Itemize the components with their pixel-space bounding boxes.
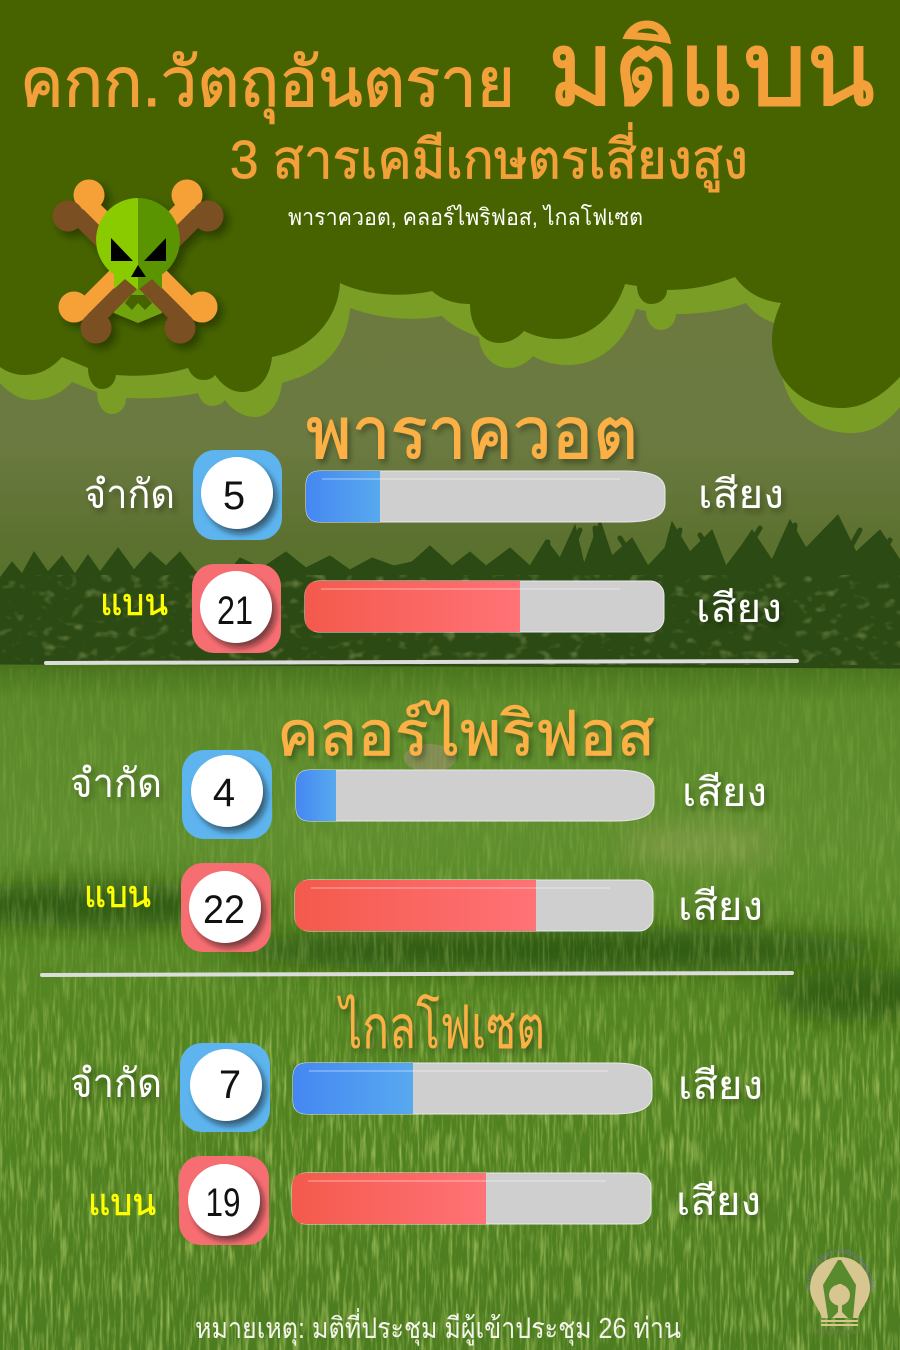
title: มติแบน <box>548 12 875 128</box>
green slime frame, lighter layer <box>0 0 900 433</box>
section: paraquat <box>84 394 784 653</box>
row: restrict 5 votes: เสียง <box>698 473 784 517</box>
row: restrict 4 votes: เสียง <box>682 771 767 815</box>
row: ban 22 votes: แบน <box>84 874 151 916</box>
row: restrict 4 votes: จำกัด <box>70 762 162 806</box>
row: ban 21 votes: แบน <box>100 582 168 624</box>
section: chlorpyrifos <box>70 699 767 952</box>
row: ban 21 votes: เสียง <box>696 587 782 631</box>
row: restrict 5 votes: 5 <box>223 474 245 518</box>
row: restrict 5 votes <box>84 450 784 540</box>
row: ban 22 votes: 22 <box>203 888 245 932</box>
heading: glyphosate: ไกลโฟเซต <box>337 993 545 1061</box>
row: restrict 7 votes: จำกัด <box>70 1062 162 1106</box>
subtitle: 3 สารเคมีเกษตรเสี่ยงสูง <box>230 122 748 192</box>
row: ban 19 votes <box>88 1156 761 1245</box>
title <box>20 12 875 128</box>
row: ban 22 votes <box>84 863 763 952</box>
row: ban 19 votes: 19 <box>206 1181 240 1225</box>
row: ban 19 votes: แบน <box>88 1182 156 1224</box>
divider <box>42 973 792 975</box>
icon: skull and crossbones <box>52 180 224 344</box>
background: rice field photo <box>0 303 900 1350</box>
section: glyphosate <box>70 993 763 1245</box>
row: ban 22 votes: เสียง <box>678 885 763 929</box>
heading: chlorpyrifos: คลอร์ไพริฟอส <box>277 699 655 769</box>
title: คกก.วัตถุอันตราย <box>20 45 515 124</box>
footnote: หมายเหตุ: มติที่ประชุม มีผู้เข้าประชุม 26 ท่าน <box>195 1308 681 1346</box>
divider <box>46 661 797 663</box>
row: ban 21 votes <box>100 564 782 653</box>
green slime frame, dark layer <box>0 0 900 408</box>
row: restrict 7 votes: 7 <box>219 1063 241 1107</box>
row: restrict 4 votes <box>70 750 767 839</box>
chemical names: พาราควอต, คลอร์ไพริฟอส, ไกลโฟเซต <box>288 204 643 230</box>
row: ban 19 votes: เสียง <box>676 1180 761 1224</box>
row: restrict 7 votes: เสียง <box>678 1064 763 1108</box>
icon: agency logo: สำนักข่าวอิศรา http://www.isranews.org <box>805 1248 874 1290</box>
row: restrict 7 votes <box>70 1043 763 1132</box>
row: restrict 4 votes: 4 <box>213 771 235 815</box>
row: restrict 5 votes: จำกัด <box>84 473 175 517</box>
heading: paraquat: พาราควอต <box>306 394 638 474</box>
row: ban 21 votes: 21 <box>217 589 253 633</box>
icon: agency logo: ISRANEWS AGENCY <box>816 1330 862 1336</box>
